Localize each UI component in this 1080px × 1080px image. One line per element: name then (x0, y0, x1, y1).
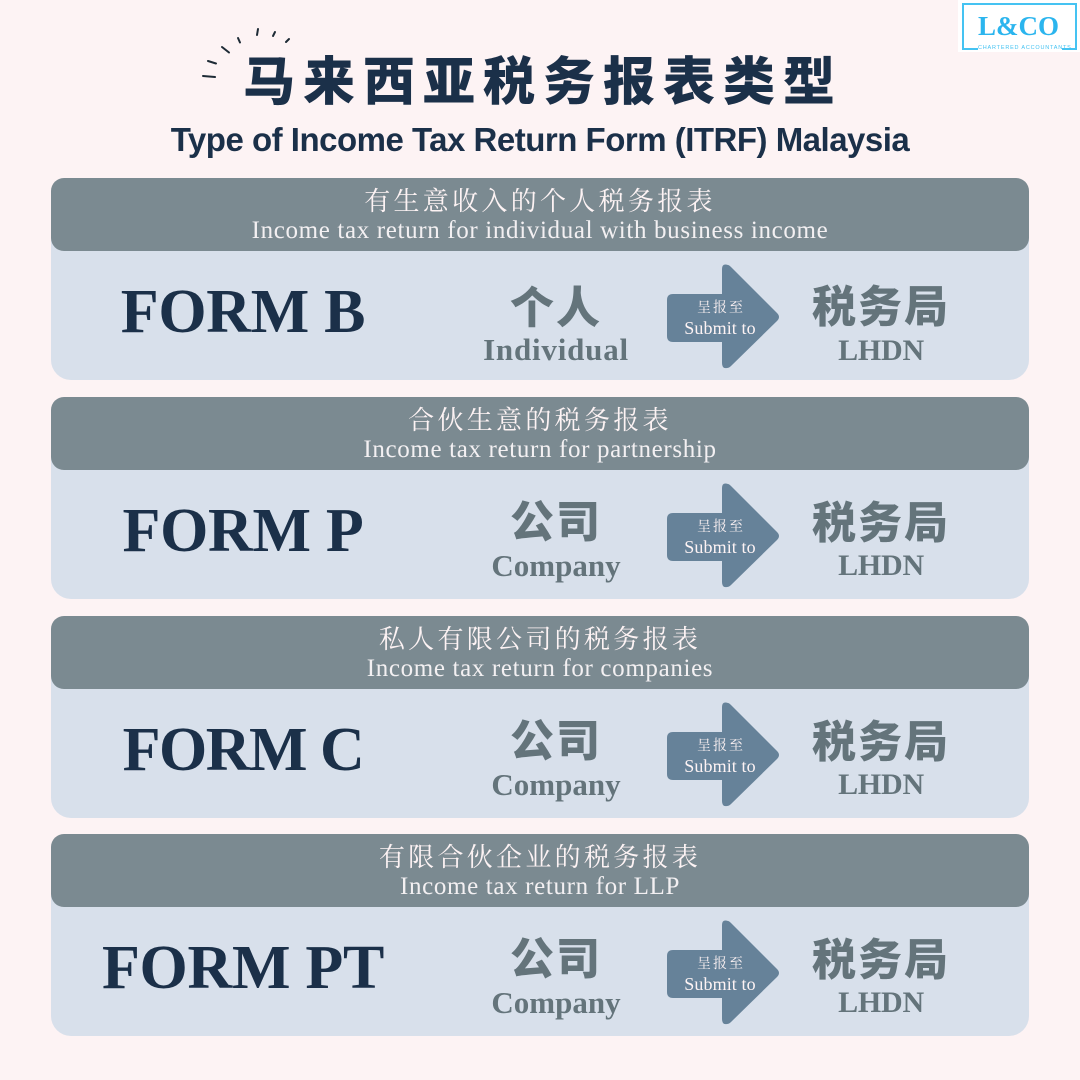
recipient label: LHDN: LHDN (838, 768, 924, 801)
recipient label: LHDN: LHDN (838, 334, 924, 367)
panel header: Form B description (51, 178, 1029, 251)
arrow label: English: Submit to (684, 756, 756, 776)
arrow label: Chinese: 呈报至 (697, 735, 745, 755)
panel: Form B (51, 178, 1029, 380)
panel: Form C (51, 616, 1029, 818)
panel header: Form PT description (51, 834, 1029, 907)
arrow label: English: Submit to (684, 974, 756, 994)
filer label: Company: Company (491, 548, 621, 583)
arrow: submit to (667, 264, 779, 368)
recipient: tax bureau: 税务局 (812, 706, 950, 770)
logo: L&CO: L&CO (978, 11, 1059, 41)
recipient label: LHDN: LHDN (838, 986, 924, 1019)
arrow: submit to (667, 702, 779, 806)
panel header: Form P description: Income tax return for partnership (363, 436, 717, 463)
arrow: submit to (667, 484, 779, 588)
logo: L&CO (958, 0, 1080, 52)
filer: Individual: 个人 (510, 272, 602, 336)
panel header: Form P description: 合伙生意的税务报表 (408, 400, 672, 437)
form name: Form C: FORM C (123, 716, 363, 784)
recipient label: LHDN: LHDN (838, 549, 924, 582)
filer: Company: 公司 (510, 705, 602, 769)
form name: Form P: FORM P (123, 497, 363, 565)
panel header: Form C description (51, 616, 1029, 689)
icon: sunburst accent strokes (202, 28, 290, 78)
arrow: submit to (667, 920, 779, 1024)
filer label: Company: Company (491, 985, 621, 1020)
arrow label: Chinese: 呈报至 (697, 953, 745, 973)
arrow label: English: Submit to (684, 318, 756, 338)
filer label: Company: Company (491, 767, 621, 802)
arrow label: English: Submit to (684, 537, 756, 557)
recipient: tax bureau: 税务局 (812, 924, 950, 988)
panel header: Form PT description: 有限合伙企业的税务报表 (379, 837, 701, 874)
form name: Form B: FORM B (121, 278, 365, 346)
panel header: Form C description: Income tax return for companies (367, 655, 713, 682)
title: Chinese: 马来西亚税务报表类型 (243, 40, 843, 115)
logo: L&CO: CHARTERED ACCOUNTANTS (978, 45, 1072, 51)
filer: Company: 公司 (510, 486, 602, 550)
panel header: Form C description: 私人有限公司的税务报表 (379, 619, 701, 656)
panel: Form PT (51, 834, 1029, 1036)
panel: Form P (51, 397, 1029, 599)
recipient: tax bureau: 税务局 (812, 271, 950, 335)
panel header: Form PT description: Income tax return for LLP (400, 873, 680, 900)
title: English: Type of Income Tax Return Form (ITRF) Malaysia (171, 121, 909, 158)
form name: Form PT: FORM PT (102, 934, 384, 1002)
filer label: Individual: Individual (483, 332, 629, 367)
arrow label: Chinese: 呈报至 (697, 297, 745, 317)
recipient: tax bureau: 税务局 (812, 487, 950, 551)
panel header: Form P description (51, 397, 1029, 470)
arrow label: Chinese: 呈报至 (697, 516, 745, 536)
filer: Company: 公司 (510, 923, 602, 987)
panel header: Form B description: 有生意收入的个人税务报表 (364, 181, 716, 218)
panel header: Form B description: Income tax return for individual with business income (252, 217, 828, 244)
